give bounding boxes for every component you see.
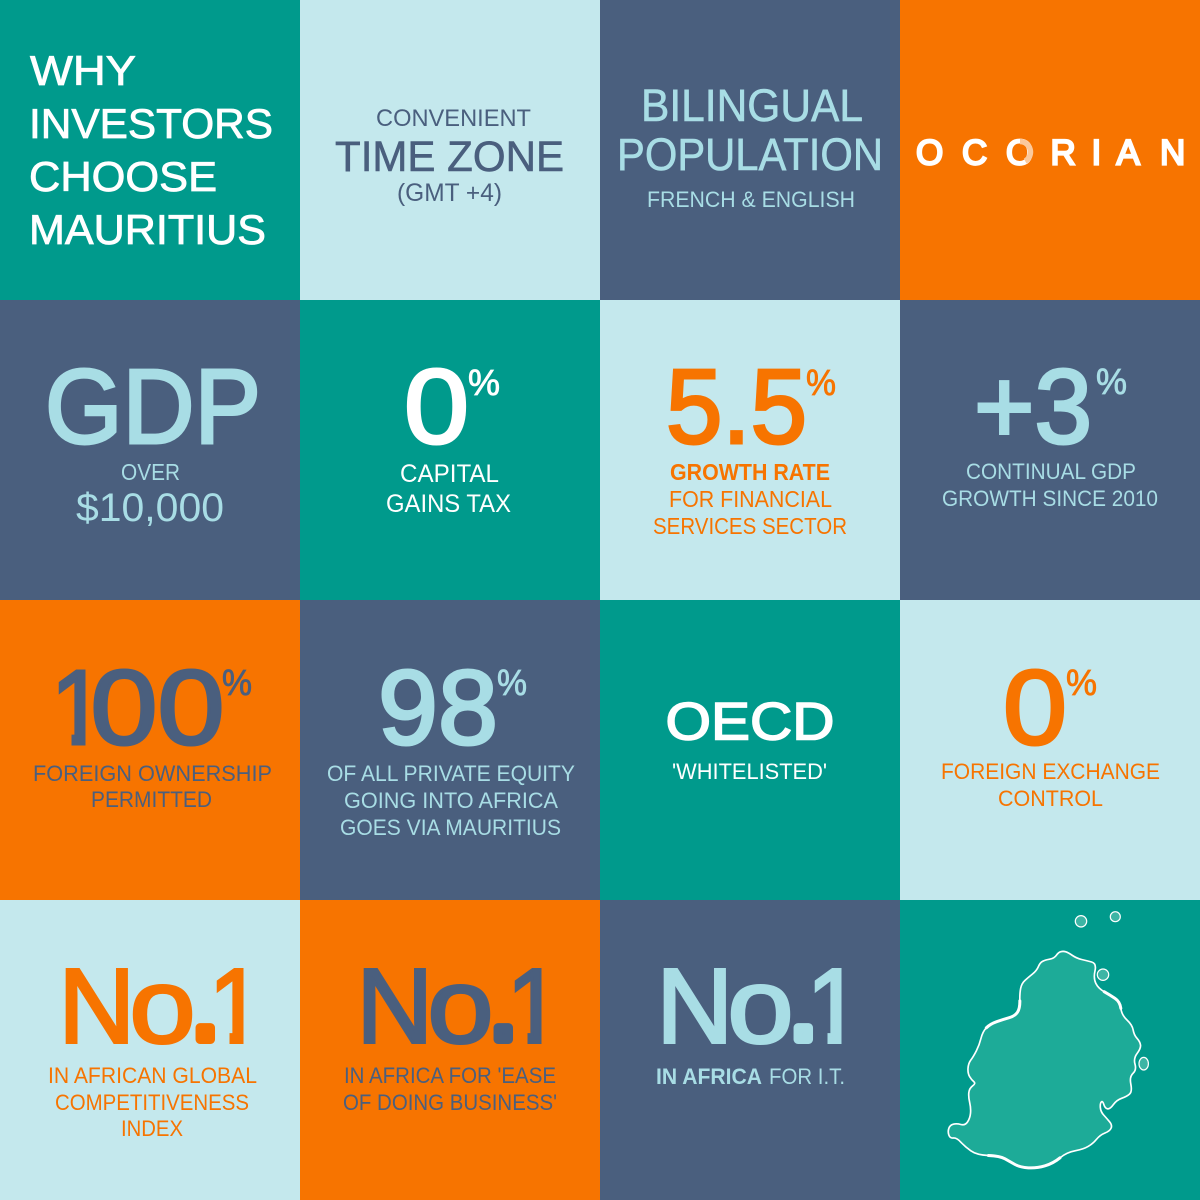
label: in Africa for IT: FOR I.T. [769,1064,845,1089]
label: population: POPULATION [617,129,883,180]
label: foreign exchange control: CONTROL [998,786,1103,811]
stat: 98 percent: 98 [378,649,498,767]
label: foreign ownership permitted [33,761,272,812]
stat: 100 percent: 00 [90,649,224,767]
stat: 98 percent: % [497,662,527,703]
label: private equity into Africa [327,761,575,840]
stat: 5.5 percent: 5.5 [666,348,807,466]
stat: No.1: N [356,948,433,1066]
stat: No.1: o [728,948,794,1066]
panel: OECD [600,600,900,900]
stat: 100 percent [58,668,252,746]
label: time zone: TIME ZONE [335,133,564,181]
stat: 100 percent: 1 [50,649,106,767]
stat: plus 3 percent: +3 [974,348,1092,466]
label: GMT +4: (GMT +4) [397,179,502,207]
panel: logo [900,0,1200,300]
label: continual GDP growth: CONTINUAL GDP [966,459,1136,484]
panel: foreign ownership [0,600,300,900]
label: bilingual: BILINGUAL [641,80,863,131]
label: growth rate for financial services sector: FOR FINANCIAL [669,486,832,512]
label: African global competitiveness index: COMPETITIVENESS [55,1090,249,1115]
stat: 0 percent: % [1066,662,1097,703]
label: continual GDP growth [942,459,1158,511]
heading: why investors choose Mauritius: CHOOSE [29,153,217,200]
stat: No.1: o [428,948,494,1066]
heading: why investors choose Mauritius: WHY [30,47,136,94]
label: foreign ownership permitted: FOREIGN OWNERSHIP [33,761,272,786]
stat: 0 percent: 0 [404,348,469,466]
label: in Africa for IT [656,1064,845,1089]
panel: GDP growth [900,300,1200,600]
label: African global competitiveness index: IN AFRICAN GLOBAL [48,1063,257,1088]
heading: why investors choose Mauritius [29,47,273,253]
panel: map [900,900,1200,1200]
stat: plus 3 percent: % [1096,361,1127,402]
label: African global competitiveness index: INDEX [121,1116,183,1141]
label: ease of doing business: OF DOING BUSINESS' [343,1090,557,1115]
label: capital gains tax: GAINS TAX [386,490,511,518]
stat: 5.5 percent: % [806,362,836,403]
heading: why investors choose Mauritius: INVESTORS [29,100,273,147]
label: growth rate for financial services sector: GROWTH RATE [670,459,830,485]
stat: 0 percent: % [468,362,500,403]
label: capital gains tax: CAPITAL [400,460,499,488]
stat: No.1: . [190,940,221,1064]
stat: No.1 [66,968,244,1045]
label: growth rate for financial services sector [653,459,847,539]
stat: No.1: . [788,940,819,1064]
label: African global competitiveness index [48,1063,257,1141]
label: private equity into Africa: GOING INTO AFRICA [344,788,558,813]
stat: No.1: o [130,948,196,1066]
stat: 0 percent [1003,649,1097,767]
label: whitelisted: 'WHITELISTED' [672,759,827,784]
label: private equity into Africa: OF ALL PRIVATE EQUITY [327,761,575,786]
label: over: OVER [121,459,180,485]
heading: why investors choose Mauritius: MAURITIUS [29,206,266,253]
logo: Ocorian wordmark: OCORIAN [916,134,1185,172]
stat: 0 percent [404,348,500,466]
label: French and English: FRENCH & ENGLISH [647,187,855,212]
panel: competitiveness [0,900,300,1200]
stat: OECD: OECD [666,692,834,752]
label: continual GDP growth: GROWTH SINCE 2010 [942,486,1158,511]
map: Mauritius island [948,951,1141,1168]
panel: ease of doing business [300,900,600,1200]
label: ease of doing business [343,1063,557,1115]
label: foreign exchange control: FOREIGN EXCHANGE [941,759,1160,784]
panel: foreign exchange control [900,600,1200,900]
stat: 100 percent: % [222,662,252,703]
label: private equity into Africa: GOES VIA MAURITIUS [340,815,561,840]
label: convenient: CONVENIENT [376,105,531,132]
panel: GDP [0,300,300,600]
label: growth rate for financial services sector: SERVICES SECTOR [653,513,847,539]
label: in Africa for IT: IN AFRICA [656,1064,762,1089]
panel: private equity [300,600,600,900]
stat: No.1 [664,968,842,1045]
label: ease of doing business: IN AFRICA FOR 'EASE [344,1063,556,1088]
panel: capital gains tax [300,300,600,600]
panel: bilingual population [600,0,900,300]
value: 10,000 dollars: $10,000 [76,486,224,530]
panel: IT [600,900,900,1200]
label: foreign ownership permitted: PERMITTED [91,787,212,812]
stat: No.1: N [656,948,733,1066]
stat: No.1: 1 [806,948,862,1066]
icon: islets [1075,912,1148,1070]
stat: No.1: 1 [506,948,562,1066]
stat: GDP: GDP [45,348,261,466]
panel: title [0,0,300,300]
stat: No.1: 1 [208,948,264,1066]
panel: growth rate [600,300,900,600]
label: foreign exchange control [941,759,1160,811]
stat: No.1: N [58,948,135,1066]
stat: No.1 [364,968,542,1045]
label: capital gains tax [386,460,511,518]
stat: No.1: . [488,940,519,1064]
panel: time zone [300,0,600,300]
stat: 0 percent: 0 [1003,649,1067,767]
